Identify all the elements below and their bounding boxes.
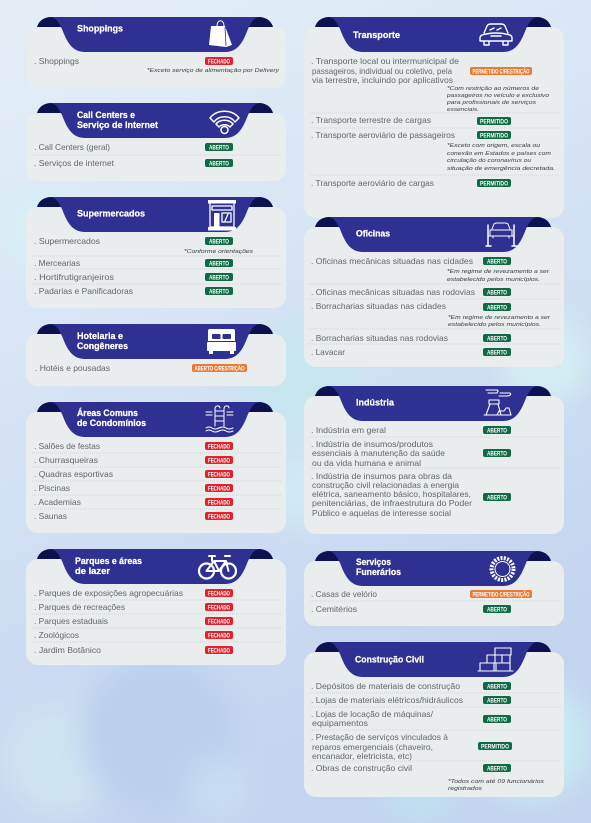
row: Indústria construção civil: construção civil relacionadas a energia xyxy=(312,481,459,490)
icon: car lift xyxy=(486,223,517,246)
note xyxy=(448,315,551,328)
row: Parques de recreações: . Parques de recreações xyxy=(34,603,125,612)
heading: Hotelaria: Congêneres xyxy=(77,341,128,351)
badge: fechado: FECHADO xyxy=(208,647,230,654)
row: Lojas de locação: . Lojas de locação de máquinas/ xyxy=(311,710,434,719)
heading: Áreas Comuns xyxy=(77,408,146,428)
row: Prestação de serviços: . Prestação de serviços vinculados à xyxy=(311,733,448,742)
row: Hortifrutigranjeiros: . Hortifrutigranjeiros xyxy=(34,273,114,282)
panel: Indústria xyxy=(304,386,564,534)
row: Jardim Botânico: . Jardim Botânico xyxy=(34,646,101,655)
row: Transporte local: via terrestre, incluindo por aplicativos xyxy=(312,76,453,85)
badge: fechado xyxy=(205,603,233,611)
icon: shopping bag xyxy=(209,21,232,47)
badge: aberto xyxy=(483,696,511,704)
badge: aberto xyxy=(483,605,511,613)
panel: Parques xyxy=(26,549,286,665)
panel: Shoppings xyxy=(26,17,286,88)
heading: Serviços Funerários xyxy=(356,557,401,577)
icon: car xyxy=(480,24,512,45)
row: Casas de velório: . Casas de velório xyxy=(311,590,377,599)
row: Transporte local xyxy=(311,57,459,85)
heading: Call Centers: Serviço de Internet xyxy=(77,120,158,130)
badge: fechado: FECHADO xyxy=(208,485,230,492)
panel: Supermercados xyxy=(26,197,286,308)
note: *Exceto com origem, escala ou xyxy=(447,143,540,149)
badge: aberto: ABERTO xyxy=(487,427,507,434)
row: Indústria de insumos: . Indústria de insumos/produtos xyxy=(311,440,433,449)
row: Oficinas cidades: . Oficinas mecânicas situadas nas cidades xyxy=(311,257,473,266)
badge: aberto xyxy=(483,348,511,356)
heading: Serviços Funerários: Serviços xyxy=(356,557,391,567)
icon: bricks xyxy=(478,648,513,671)
badge: aberto: ABERTO xyxy=(487,606,507,613)
badge: aberto: ABERTO xyxy=(209,274,229,281)
row: Transporte terrestre: . Transporte terrestre de cargas xyxy=(311,116,431,125)
badge: aberto: ABERTO xyxy=(209,144,229,151)
row: Transporte local: . Transporte local ou intermunicipal de xyxy=(311,57,459,66)
row: Lavacar: . Lavacar xyxy=(311,348,345,357)
row: Saunas: . Saunas xyxy=(34,512,67,521)
row: Obras de construção civil: . Obras de construção civil xyxy=(311,764,412,773)
note: circulação do coronavírus ou xyxy=(447,158,531,164)
badge: permitido com restrição: PERMETIDO C/RESTRIÇÃO xyxy=(472,66,530,75)
badge: aberto xyxy=(483,493,511,501)
row: Churrasqueiras: . Churrasqueiras xyxy=(34,456,98,465)
badge: fechado xyxy=(205,498,233,506)
badge: aberto: ABERTO xyxy=(209,160,229,167)
icon: store xyxy=(208,200,236,230)
heading: Supermercados: Supermercados xyxy=(77,208,145,218)
row: Parques de exposições: . Parques de exposições agropecuárias xyxy=(34,589,183,598)
note: para profissionais de serviços xyxy=(446,100,536,106)
heading: Áreas Comuns: Áreas Comuns xyxy=(77,408,138,418)
row: Prestação de serviços: reparos emergenciais (chaveiro, xyxy=(312,743,433,752)
note: registrados xyxy=(448,786,482,792)
badge: aberto: ABERTO xyxy=(487,349,507,356)
row: Salões de festas: . Salões de festas xyxy=(34,442,100,451)
badge: aberto xyxy=(483,334,511,342)
badge: aberto xyxy=(483,449,511,457)
badge: aberto: ABERTO xyxy=(487,335,507,342)
badge: aberto: ABERTO xyxy=(209,260,229,267)
panel: Áreas Comuns xyxy=(26,402,286,533)
badge: fechado xyxy=(205,442,233,450)
badge: fechado: FECHADO xyxy=(208,443,230,450)
heading: Hotelaria: Hotelaria e xyxy=(77,331,123,341)
badge: fechado: FECHADO xyxy=(208,604,230,611)
note xyxy=(447,269,550,283)
row: Shoppings: . Shoppings xyxy=(34,57,79,66)
badge: aberto xyxy=(483,426,511,434)
icon: wreath xyxy=(492,558,514,580)
note: estabelecido pelos municípios. xyxy=(447,277,540,283)
note: *Conforme orientações xyxy=(184,249,253,255)
badge: aberto xyxy=(205,237,233,245)
badge: aberto xyxy=(483,715,511,723)
badge: permitido xyxy=(477,179,511,187)
badge: aberto xyxy=(483,764,511,772)
row: Lojas de locação xyxy=(311,710,434,728)
note: estabelecido pelos municípios. xyxy=(448,322,541,328)
row: Indústria construção civil: elétrica, saneamento básico, hospitalares, xyxy=(312,490,471,499)
row: Academias: . Academias xyxy=(34,498,81,507)
row: Depósitos: . Depósitos de materiais de construção xyxy=(311,682,460,691)
panel: Serviços Funerários xyxy=(304,551,564,626)
badge: aberto: ABERTO xyxy=(209,288,229,295)
badge: aberto xyxy=(483,288,511,296)
badge: permitido com restrição xyxy=(470,589,532,598)
badge: permitido: PERMITIDO xyxy=(481,743,509,750)
row: Mercearias: . Mercearias xyxy=(34,259,80,268)
icon: pool xyxy=(206,406,233,432)
badge: permitido: PERMITIDO xyxy=(480,118,508,125)
badge: fechado xyxy=(205,631,233,639)
badge: fechado: FECHADO xyxy=(208,513,230,520)
heading: Hotelaria xyxy=(77,331,128,351)
badge: fechado: FECHADO xyxy=(208,457,230,464)
badge: aberto: ABERTO xyxy=(487,289,507,296)
note: passageiros no veículo e exclusivo xyxy=(446,93,549,99)
badge: fechado xyxy=(205,589,233,597)
row: Borracharias cidades: . Borracharias situadas nas cidades xyxy=(311,302,446,311)
panel: Oficinas xyxy=(304,217,564,367)
row: Oficinas rodovias: . Oficinas mecânicas situadas nas rodovias xyxy=(311,288,475,297)
badge: fechado: FECHADO xyxy=(208,590,230,597)
row: Transporte aeroviário passageiros: . Transporte aeroviário de passageiros xyxy=(311,131,455,140)
row: Piscinas: . Piscinas xyxy=(34,484,70,493)
badge: permitido xyxy=(477,131,511,139)
badge: aberto: ABERTO xyxy=(487,683,507,690)
row: Parques estaduais: . Parques estaduais xyxy=(34,617,108,626)
note: *Exceto serviço de alimentação por Delivery xyxy=(147,68,280,74)
badge: fechado: FECHADO xyxy=(208,618,230,625)
row: Prestação de serviços: encanador, eletricista, etc) xyxy=(312,752,412,761)
heading: Transporte: Transporte xyxy=(353,30,400,40)
badge: aberto xyxy=(205,159,233,167)
note: *Em regime de revezamento a ser xyxy=(447,269,550,275)
heading: Oficinas: Oficinas xyxy=(356,228,390,238)
badge: permitido xyxy=(478,742,512,750)
row: Borracharias rodovias: . Borracharias situadas nas rodovias xyxy=(311,334,448,343)
icon: wifi xyxy=(210,111,239,134)
panel: Construção Civil xyxy=(304,642,564,797)
row: Zoológicos: . Zoológicos xyxy=(34,631,79,640)
note: *Todos com até 09 funcionários xyxy=(448,779,544,785)
badge: aberto: ABERTO xyxy=(487,450,507,457)
badge: fechado: FECHADO xyxy=(208,58,230,65)
badge: permitido com restrição xyxy=(470,66,532,75)
icon: factory xyxy=(484,390,511,415)
heading: Parques: de lazer xyxy=(75,566,111,576)
heading: Call Centers xyxy=(77,110,158,130)
row: Lojas de locação: equipamentos xyxy=(312,719,368,728)
panel: Transporte xyxy=(304,17,564,218)
row: Lojas de materiais: . Lojas de materiais elétricos/hidráulicos xyxy=(311,696,463,705)
badge: fechado xyxy=(205,456,233,464)
badge: fechado: FECHADO xyxy=(208,499,230,506)
badge: aberto: ABERTO xyxy=(487,716,507,723)
note xyxy=(448,779,544,792)
row: Padarias: . Padarias e Panificadoras xyxy=(34,287,133,296)
badge: aberto xyxy=(483,682,511,690)
row: Prestação de serviços xyxy=(311,733,448,761)
badge: permitido: PERMITIDO xyxy=(480,132,508,139)
badge: aberto xyxy=(205,143,233,151)
row: Cemitérios: . Cemitérios xyxy=(311,605,357,614)
badge: aberto: ABERTO xyxy=(209,238,229,245)
note: *Em regime de revezamento a ser xyxy=(448,315,551,321)
row: Indústria construção civil: . Indústria de insumos para obras da xyxy=(311,472,452,481)
heading: Serviços Funerários: Funerários xyxy=(356,567,401,577)
note xyxy=(447,143,555,172)
note xyxy=(446,86,549,113)
badge: fechado xyxy=(205,484,233,492)
row: Transporte local: passageiros, individual ou coletivo, pela xyxy=(312,67,452,76)
heading: Parques: Parques e áreas xyxy=(75,556,142,566)
badge: permitido: PERMITIDO xyxy=(480,180,508,187)
badge: aberto xyxy=(205,287,233,295)
badge: aberto xyxy=(483,257,511,265)
badge: aberto xyxy=(205,259,233,267)
heading: Áreas Comuns: de Condomínios xyxy=(77,418,146,428)
row: Indústria construção civil: Público e aquelas de interesse social xyxy=(312,509,451,518)
row: Indústria construção civil xyxy=(311,472,472,518)
badge: fechado xyxy=(205,617,233,625)
heading: Parques xyxy=(75,556,142,576)
icon: bicycle xyxy=(199,556,236,578)
heading: Call Centers: Call Centers e xyxy=(77,110,135,120)
badge: aberto: ABERTO xyxy=(487,258,507,265)
row: Supermercados: . Supermercados xyxy=(34,237,100,246)
row: Serviços de internet: . Serviços de internet xyxy=(34,159,115,168)
badge: aberto com restrição: ABERTO C/RESTRIÇÃO xyxy=(194,363,244,372)
row: Indústria em geral: . Indústria em geral xyxy=(311,426,386,435)
heading: Indústria: Indústria xyxy=(356,398,395,408)
badge: fechado xyxy=(205,646,233,654)
heading: Construção Civil: Construção Civil xyxy=(355,654,424,664)
row: Indústria de insumos: essenciais à manutenção da saúde xyxy=(312,449,445,458)
badge: permitido xyxy=(477,117,511,125)
row: Hotéis e pousadas: . Hotéis e pousadas xyxy=(35,364,110,373)
row: Indústria de insumos xyxy=(311,440,445,468)
badge: aberto: ABERTO xyxy=(487,494,507,501)
panel: Call Centers xyxy=(26,103,286,181)
icon: bed xyxy=(207,329,236,354)
badge: permitido com restrição: PERMETIDO C/RESTRIÇÃO xyxy=(472,589,530,598)
row: Indústria construção civil: penitenciárias, de infraestrutura do Poder xyxy=(312,499,472,508)
row: Call Centers: . Call Centers (geral) xyxy=(34,143,110,152)
badge: aberto: ABERTO xyxy=(487,304,507,311)
badge: fechado xyxy=(205,57,233,65)
badge: aberto xyxy=(483,303,511,311)
note: essenciais. xyxy=(447,107,479,113)
row: Indústria de insumos: ou da vida humana e animal xyxy=(312,459,421,468)
heading: Shoppings: Shoppings xyxy=(77,24,123,34)
note: conexão em Estados e países com xyxy=(447,151,551,157)
badge: fechado: FECHADO xyxy=(208,471,230,478)
note: *Com restrição ao números de xyxy=(447,86,539,92)
badge: aberto: ABERTO xyxy=(487,697,507,704)
badge: fechado: FECHADO xyxy=(208,632,230,639)
badge: aberto com restrição xyxy=(192,363,247,372)
badge: fechado xyxy=(205,470,233,478)
row: Quadras esportivas: . Quadras esportivas xyxy=(34,470,113,479)
badge: aberto xyxy=(205,273,233,281)
row: Transporte aeroviário cargas: . Transporte aeroviário de cargas xyxy=(311,179,434,188)
badge: fechado xyxy=(205,512,233,520)
badge: aberto: ABERTO xyxy=(487,765,507,772)
panel: Hotelaria xyxy=(26,324,286,386)
note: situação de emergência decretada. xyxy=(447,166,555,172)
